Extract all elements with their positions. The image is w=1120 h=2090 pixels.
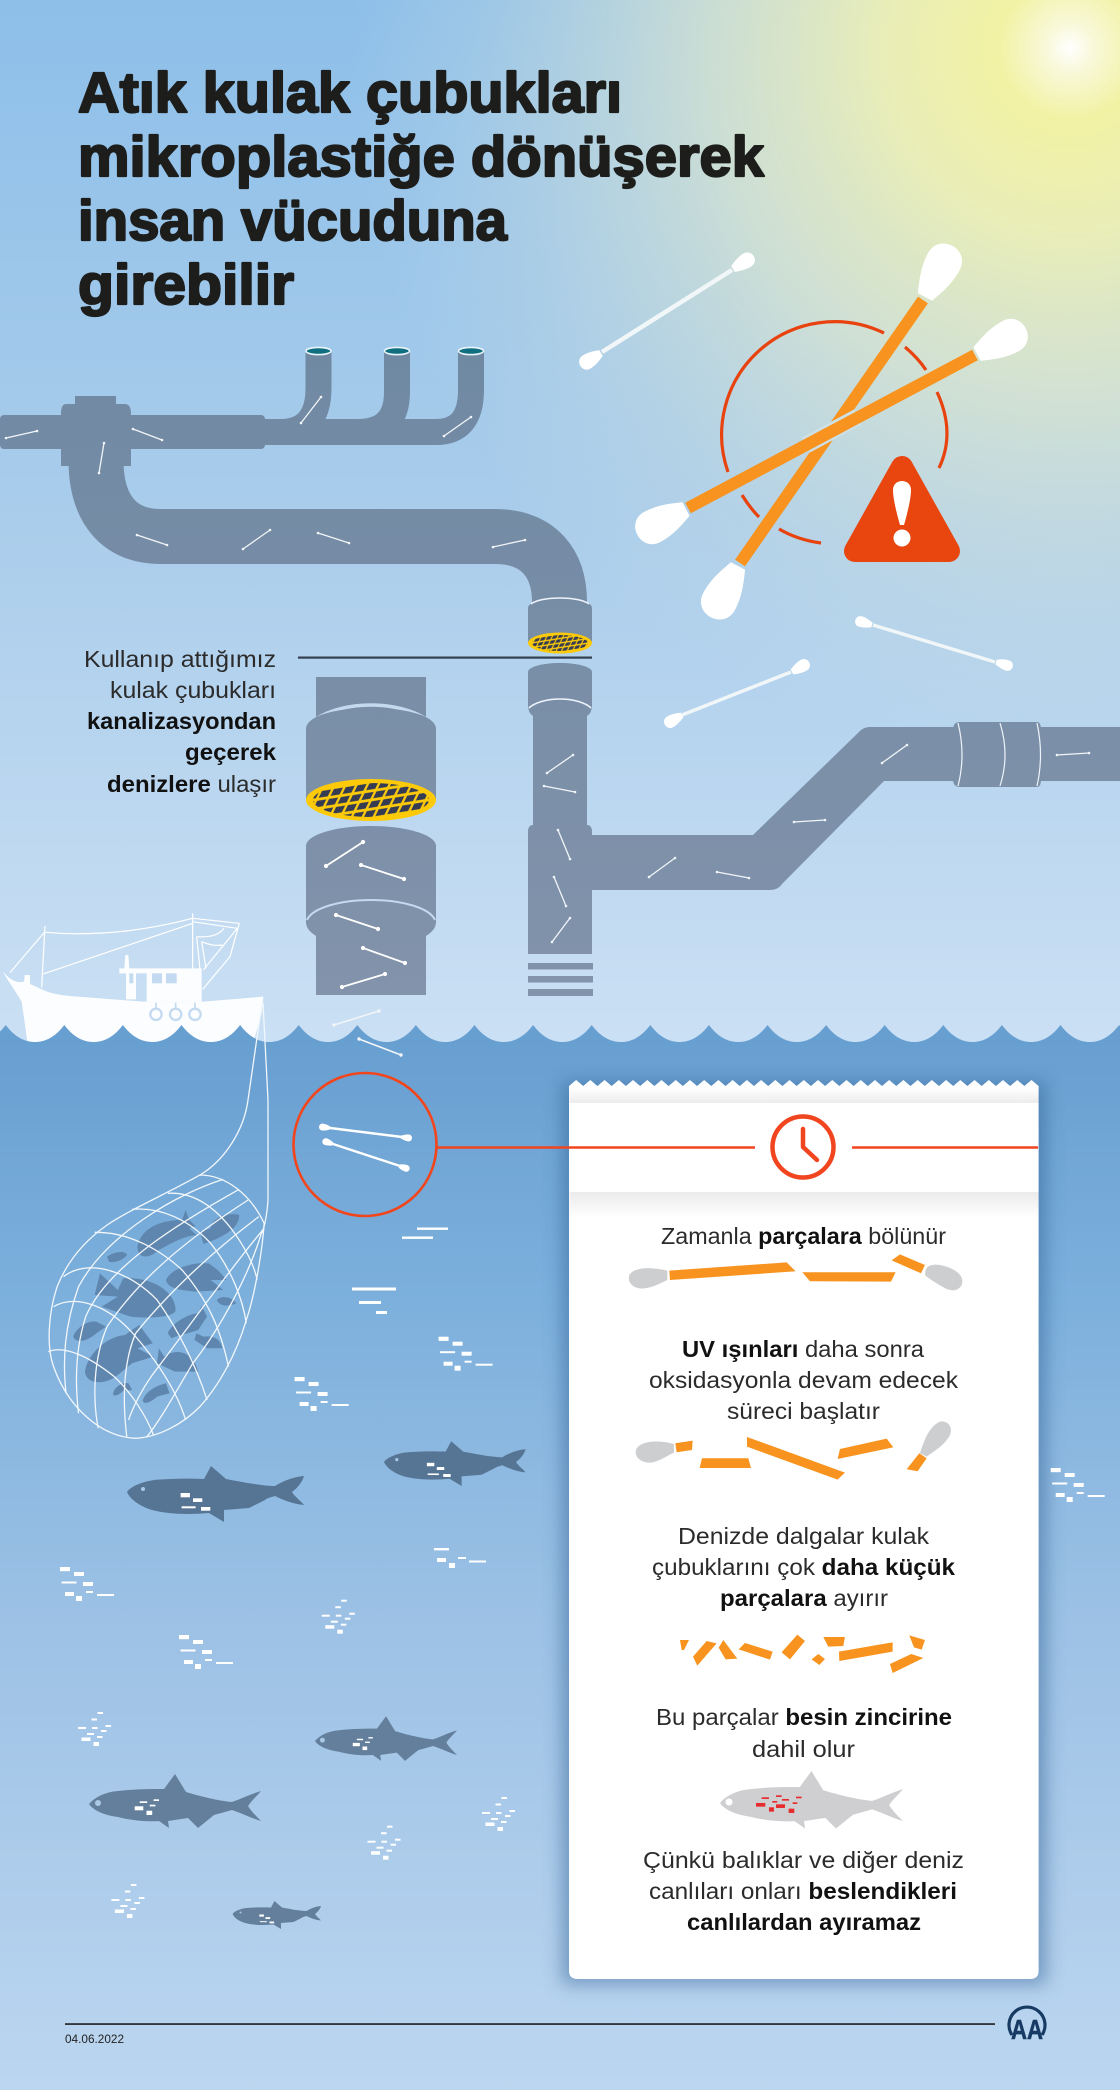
- sky background: [0, 0, 1120, 1050]
- fish: upper left: [127, 1466, 304, 1522]
- microplastic particles: [60, 1228, 1105, 1918]
- step 2 text: süreci başlatır: [727, 1398, 880, 1424]
- title: insan vücuduna: [78, 189, 508, 253]
- fish: middle: [315, 1716, 457, 1761]
- step 3 text: [652, 1523, 955, 1611]
- fishing boat: [3, 913, 263, 1048]
- enlarged filter pipe: [306, 677, 436, 995]
- step 3 text: parçalara ayırır: [720, 1585, 888, 1611]
- step 4 text: [656, 1704, 952, 1762]
- label text: denizlere ulaşır: [107, 771, 276, 797]
- fish caught in net: [73, 1210, 239, 1403]
- fish: small: [232, 1901, 321, 1929]
- label text: geçerek: [185, 739, 276, 765]
- sun glow: [300, 0, 1120, 780]
- step 4 text: Bu parçalar besin zincirine: [656, 1704, 952, 1730]
- AA logo: [1009, 2007, 1045, 2045]
- step 3 text: çubuklarını çok daha küçük: [652, 1554, 955, 1580]
- swab magnifier circle: [294, 1073, 436, 1216]
- pipe filter coupling small: [528, 598, 592, 654]
- vertical pipe with branch: [528, 663, 1120, 996]
- warning triangle icon: [855, 467, 949, 551]
- date: 04.06.2022: [65, 2034, 124, 2046]
- card shadow: [562, 1082, 1046, 1984]
- title: girebilir: [78, 253, 294, 317]
- label connector line: [298, 656, 592, 659]
- step 5 text: canlıları onları beslendikleri: [649, 1878, 957, 1904]
- step 3 text: Denizde dalgalar kulak: [678, 1523, 930, 1549]
- footer line: [65, 2023, 995, 2025]
- cotton swabs inside pipes: [6, 397, 1089, 987]
- fish: lower left: [89, 1774, 261, 1828]
- step 5 text: [643, 1847, 964, 1935]
- step 5 text: Çünkü balıklar ve diğer deniz: [643, 1847, 964, 1873]
- step 4 grey fish with microplastics: [720, 1771, 903, 1829]
- label text: Kullanıp attığımız: [84, 646, 276, 672]
- sea water with waves: [0, 1025, 1120, 2090]
- step 2 text: oksidasyonla devam edecek: [649, 1367, 959, 1393]
- step 1 text: Zamanla parçalara bölünür: [661, 1223, 946, 1249]
- falling swabs at water surface: [334, 1011, 401, 1055]
- top sewer pipe: [0, 347, 560, 602]
- step 2 broken swab: [636, 1421, 951, 1480]
- step 5 text: canlılardan ayıramaz: [687, 1909, 921, 1935]
- label text: kulak çubukları: [110, 677, 276, 703]
- explanation card: [569, 1080, 1039, 1979]
- step 1 broken swab: [629, 1254, 962, 1290]
- title: Atık kulak çubukları: [78, 61, 622, 125]
- crossed orange swabs: [629, 237, 1034, 626]
- free white swabs: [576, 250, 1014, 730]
- step 3 small fragments: [680, 1635, 925, 1673]
- fish: upper right: [384, 1441, 526, 1486]
- step 2 text: [649, 1336, 959, 1424]
- label text: [84, 646, 276, 797]
- fishing net: [48, 1003, 268, 1438]
- title: [78, 61, 764, 317]
- step 4 text: dahil olur: [752, 1736, 855, 1762]
- step 2 text: UV ışınları daha sonra: [682, 1336, 924, 1362]
- connector line: [436, 1146, 1038, 1149]
- clock icon: [772, 1116, 834, 1178]
- warning ring: [722, 322, 947, 543]
- AA logo: AA: [1011, 2014, 1043, 2045]
- label text: kanalizasyondan: [87, 708, 276, 734]
- title: mikroplastiğe dönüşerek: [78, 125, 764, 189]
